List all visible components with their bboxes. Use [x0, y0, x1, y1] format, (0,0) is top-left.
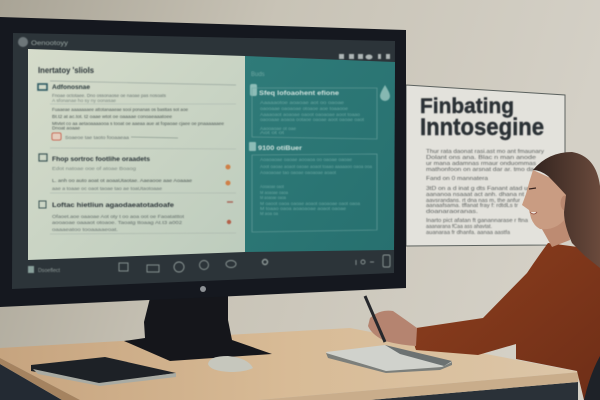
panel: right teal: Buds: [251, 72, 265, 78]
poster body text: aanaafsama. tffanat fray f: rdtdLs tr: [426, 203, 518, 209]
poster body text: ur mana adamnas rmaur onduommas: [426, 161, 537, 167]
section 1: Fuaaeae aaaaaaaee attotanaaeae sooi ponanas os basttas sot aoe: [52, 107, 188, 113]
eye: [529, 188, 536, 189]
poster body text: mathonfoon on arsnat dar ar. tmo da: [426, 167, 534, 173]
bottom toolbar icons: [28, 255, 390, 274]
top bar: [18, 37, 390, 60]
teal card 1: oaooaae oaoaoae otoaoe aoe toaaooe: [260, 106, 349, 111]
poster body text: aananoa nsaaat act anh. dhana nt: [426, 192, 525, 198]
poster body text: Inarto pict afatan ft ganannarase r ftna: [426, 218, 528, 224]
teal card 1: Sfeq lofoaohent efione: [259, 90, 339, 97]
poster body text: aavsrandans. rt dna nas m, the anfur: [426, 198, 520, 204]
teal card 1: Aaaaoaot aoaoae oaoot oaoaoae aoot toaao: [260, 112, 361, 117]
poster body text: Dolant ons ana. Blac n man anode: [426, 155, 536, 161]
teal card 2: Aooaoae oaot: [260, 184, 285, 189]
section 1: Adfonosnae: [52, 85, 91, 91]
teal card 2: M aoaoae oaoa: [260, 195, 287, 200]
warning icon: [52, 133, 61, 140]
hand: [368, 311, 417, 346]
monitor bezel: [0, 17, 406, 307]
monitor: [0, 17, 406, 307]
section 1: Dnoat aoaae: [52, 126, 80, 132]
teal card 1: oaooaae aoaoa ootaoe oaoae aoot oaoae oaot: [260, 117, 365, 122]
poster body text: Thur rata daonat rasi.ast mo ant fmaunary: [426, 149, 545, 155]
screen frame: [12, 33, 395, 289]
section 1: Bt.t2 at ac.tot. t2 oaae wtot oe oaaaae conoaeaaatoee: [52, 114, 172, 120]
poster body text: [426, 149, 545, 236]
face: [522, 170, 568, 229]
section 2: aae a toaae oc oaot taoae tao ae toaUtaotoaae: [52, 186, 162, 192]
section 3: oaaaeatoo tooaaaaeoat.: [52, 227, 118, 233]
section 2: [39, 154, 236, 193]
teal card 1: Aaaaaotoe aoaoae aot oo oaoae: [260, 100, 345, 105]
orange marks: [226, 164, 230, 170]
poster body text: 3tD on a d inat g dts Fanant atad ur: [426, 186, 530, 192]
teal card 2: 9100 otiBuer: [258, 145, 303, 152]
panel heading: Inertatoy 'slioIs: [38, 65, 94, 75]
poster title: Finbating: [420, 95, 514, 118]
top bar: Oenootoyy: [31, 40, 69, 47]
teal card 1: [250, 84, 377, 139]
sweater: [414, 243, 600, 400]
teal card 2: Aoaoaoae tao oaoae oaoaoae aoaot: [260, 170, 337, 175]
logo: [200, 286, 206, 292]
section 3: aooaoae oaaaot otoaoe. Taoatg ttoaag At.t3 a002: [52, 220, 182, 226]
poster title: [420, 95, 544, 141]
section 1: Soaeoe tae taoto fooaaeaa: [65, 135, 129, 141]
chair: [584, 356, 600, 400]
teal card 1: Aaooaoae ot oae: [260, 126, 297, 131]
pen: [365, 296, 385, 342]
toolbar icons: [339, 54, 390, 60]
mouse: [208, 356, 253, 372]
poster body text: auanaraa fr dhanfa. aanaa aastfa: [426, 230, 510, 236]
section 2: Edot natoae ooe of atoae Boaog: [52, 166, 136, 172]
poster title: Inntosegine: [420, 114, 544, 141]
section 1: Fnoae octotaee. Dno ossonaose oe naoae pas nosoats: [52, 93, 167, 99]
poster body text: aaanarana fCaa ass ahavtat.: [426, 224, 492, 230]
teal card 2: [249, 142, 377, 232]
panel: left document: [28, 49, 245, 260]
smile: [530, 212, 537, 214]
monitor stand: [124, 296, 272, 361]
bottom toolbar icons: Dsoeflect: [38, 268, 61, 274]
ear: [560, 196, 570, 210]
teal card 2: M toaao oaoa aoaoaoae aoaot oaoae: [260, 206, 347, 211]
poster body text: Fand on 0 mannatera: [426, 176, 488, 182]
notebook: [31, 357, 176, 386]
teal card 1: Aot ot ot: [260, 130, 285, 135]
desk: [0, 328, 580, 400]
section 1: Mtvtet co aa aetaoaaaaooa s tooat oe aaeaa aue at fopaoae cjaee oe pnaaaaaaee: [52, 121, 224, 127]
section 2: L. anh oo auto aoat ot aoaaUtaotae. Aaeaooe aae Aoaaae: [52, 178, 192, 184]
poster: [406, 85, 565, 246]
section 1: A sfonanae ho sy ny oonasae: [52, 98, 117, 103]
hair: [533, 152, 600, 268]
section 2: Fhop sortroc footlihe oraadets: [52, 156, 150, 163]
teal card 2: M aoaoae oaoa: [260, 190, 289, 195]
poster body text: doanaraoranas.: [426, 209, 478, 215]
teal card 2: M oaoot oaoa oaoae aoaot oaoaoae oaot oaoa: [260, 201, 361, 206]
neck: [538, 215, 570, 247]
drop icon: [380, 85, 390, 101]
section 1: [38, 84, 236, 149]
section 3: [39, 201, 236, 234]
teal card 2: Aoot oaoae aoaot oaoae aoaot toaao aaaaaoo oaoa ooa: [260, 164, 373, 169]
person: [365, 152, 600, 400]
section 3: Loftac hietliun agaodaeatotadoafe: [52, 202, 174, 209]
panel: right teal: [245, 56, 395, 252]
tablet on desk: [326, 345, 452, 373]
teal card 2: Aoaoaoae oaoae aooaoa oo oaoae oaoae: [260, 157, 353, 162]
section 3: Ofaoet.aoe oaaoae Aot oty t oo aoa oot oe Faoatatttot: [52, 214, 185, 220]
teal card 2: M aoa oa: [260, 211, 279, 216]
